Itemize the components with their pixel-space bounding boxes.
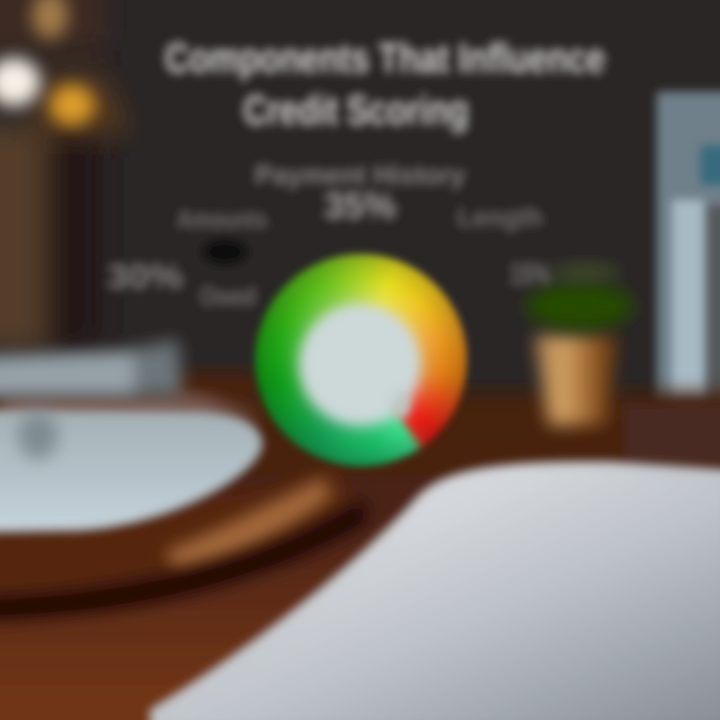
- factor labels: Amounts: [177, 204, 267, 234]
- factor labels: 15%: [510, 258, 550, 291]
- donut centre: [299, 303, 421, 425]
- factor labels: 30%: [107, 258, 183, 296]
- white paper foreground: [160, 472, 720, 720]
- title text: Credit Scoring: [244, 87, 468, 133]
- right window panel: [667, 102, 720, 400]
- lamp lights: [0, 0, 130, 132]
- subtitle and score: 35%: [324, 185, 396, 226]
- title text: [165, 35, 605, 133]
- wooden tray: [0, 465, 365, 620]
- factor labels: Length: [458, 202, 542, 232]
- title text: Components That Influence: [165, 35, 605, 81]
- wall background: [0, 0, 720, 400]
- table surface: [0, 372, 720, 720]
- donut gauge ring: [255, 254, 467, 466]
- subtitle and score: [255, 160, 465, 226]
- subtitle and score: Payment History: [255, 160, 465, 190]
- plant in pot: [526, 263, 634, 425]
- factor labels: [107, 202, 550, 311]
- dark pointer smudge: [203, 240, 247, 264]
- white plate and stand: [0, 340, 265, 532]
- donut gap notch: [392, 392, 410, 418]
- left brown column: [0, 0, 105, 350]
- factor labels: Owed: [200, 281, 256, 311]
